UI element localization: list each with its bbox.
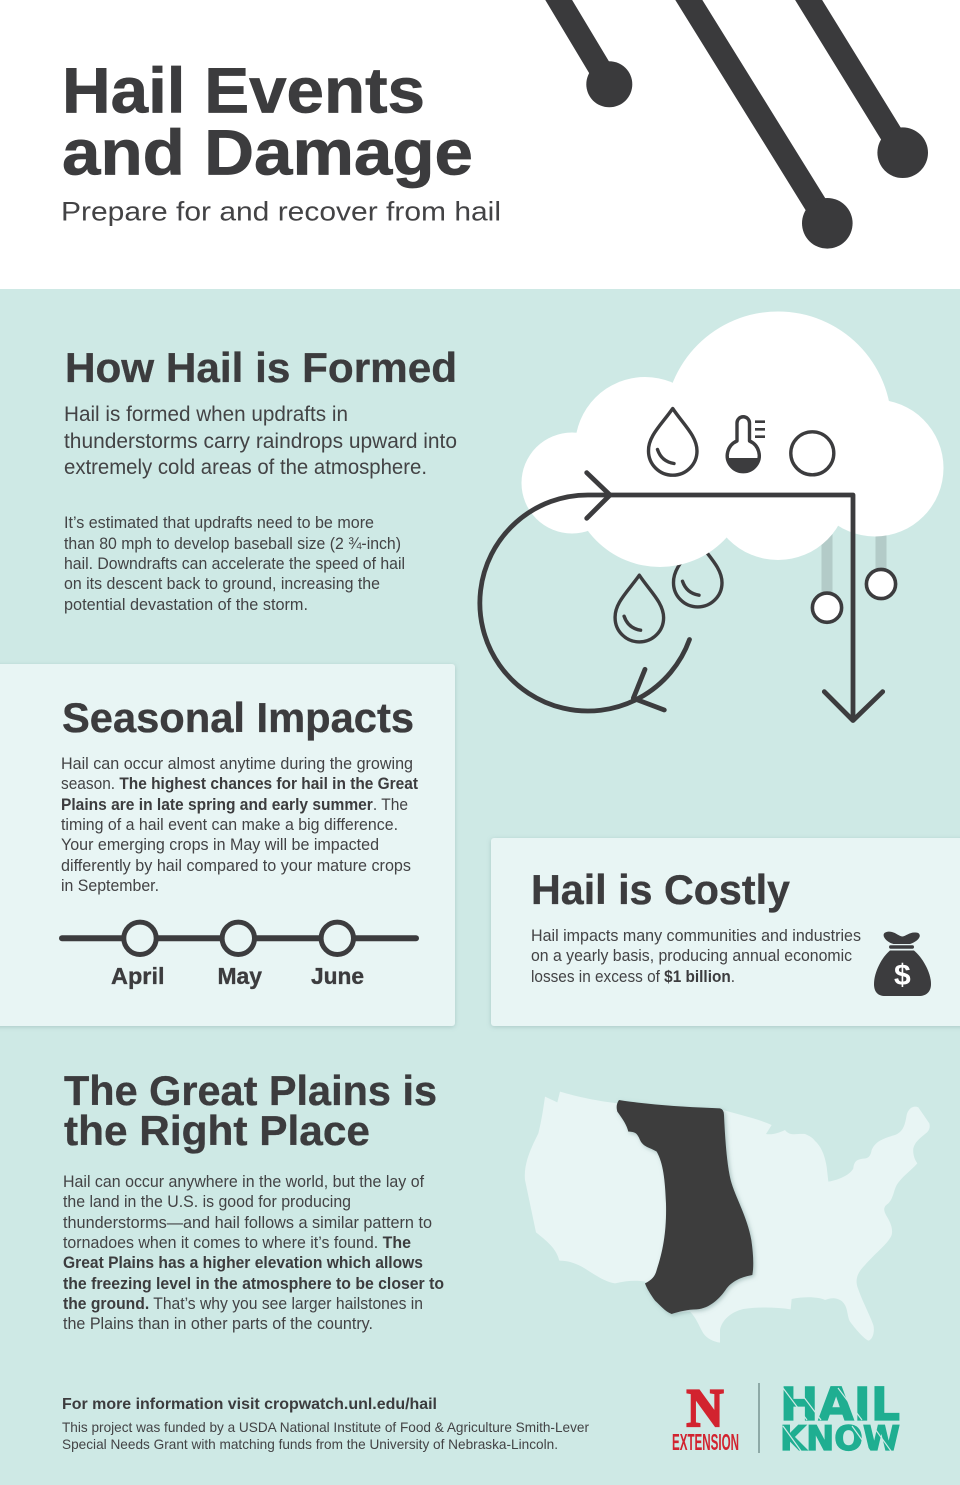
icon: raindrop in cloud	[648, 408, 697, 475]
costly text	[531, 927, 861, 986]
arrow: updraft loop and downdraft	[480, 473, 883, 720]
cloud	[522, 312, 944, 567]
seasonal text: in September.	[61, 877, 159, 895]
footer text: This project was funded by a USDA National Institute of Food & Agriculture Smith-Lever	[62, 1419, 589, 1435]
heading: hail is costly: Hail is Costly	[531, 866, 791, 913]
timeline: May	[218, 963, 262, 989]
panel: seasonal impacts	[0, 664, 455, 1026]
great plains text: the freezing level in the atmosphere to be closer to	[63, 1275, 444, 1293]
timeline: April	[111, 963, 164, 989]
costly text: Hail impacts many communities and industries	[531, 927, 861, 945]
panel: hail is costly	[491, 838, 960, 1026]
map: united states with great plains highlighted	[525, 1092, 930, 1343]
heading: seasonal impacts: Seasonal Impacts	[62, 694, 414, 741]
cloud diagram	[480, 312, 944, 720]
detail text: on its descent back to ground, increasing the	[64, 575, 380, 593]
seasonal text: differently by hail compared to your mature crops	[61, 857, 411, 875]
great plains text: the Plains than in other parts of the country.	[63, 1315, 373, 1333]
costly text: losses in excess of $1 billion.	[531, 968, 735, 986]
great plains text: the ground. That’s why you see larger hailstones in	[63, 1295, 423, 1313]
intro text: Hail is formed when updrafts in	[64, 403, 348, 426]
seasonal text: Your emerging crops in May will be impacted	[61, 836, 379, 854]
timeline	[62, 922, 416, 989]
map: us outline	[525, 1092, 930, 1343]
detail text: It’s estimated that updrafts need to be more	[64, 514, 374, 532]
great plains text: Hail can occur anywhere in the world, but the lay of	[63, 1173, 424, 1191]
great plains text: Great Plains has a higher elevation which allows	[63, 1254, 423, 1272]
logo: hail know	[780, 1378, 900, 1459]
raindrop behind cloud	[673, 540, 722, 607]
map: great plains region	[617, 1100, 753, 1314]
panel: how hail is formed text	[64, 344, 457, 614]
icon: thermometer	[727, 417, 765, 472]
logo: nebraska extension	[672, 1378, 739, 1455]
seasonal text: Plains are in late spring and early summer. The	[61, 796, 408, 814]
detail text: hail. Downdrafts can accelerate the speed of hail	[64, 555, 405, 573]
panel: great plains text	[63, 1067, 444, 1333]
icon: money bag	[874, 932, 931, 996]
great plains text: thunderstorms—and hail follows a similar pattern to	[63, 1214, 432, 1232]
logo: nebraska extension: EXTENSION	[672, 1429, 739, 1455]
footer text	[62, 1396, 589, 1452]
icon: falling hailstones	[812, 569, 896, 622]
title	[62, 55, 473, 188]
costly text: on a yearly basis, producing annual economic	[531, 947, 852, 965]
great plains text	[63, 1173, 444, 1333]
detail text	[64, 514, 405, 614]
logo: nebraska extension: N	[686, 1378, 724, 1438]
seasonal text: Hail can occur almost anytime during the growing	[61, 755, 413, 773]
title: and Damage	[62, 116, 473, 188]
great plains text: tornadoes when it comes to where it’s found. The	[63, 1234, 411, 1252]
heading: the great plains: The Great Plains is	[64, 1067, 437, 1114]
icon: hailstone in cloud	[791, 432, 834, 475]
timeline: June	[311, 963, 364, 989]
logo: hail know: HAIL	[780, 1378, 900, 1431]
intro text	[64, 403, 457, 479]
seasonal text	[61, 755, 418, 895]
intro text: thunderstorms carry raindrops upward into	[64, 430, 457, 453]
header hailstones	[554, 0, 928, 249]
logo: hail know: KNOW	[780, 1419, 900, 1459]
intro text: extremely cold areas of the atmosphere.	[64, 456, 427, 479]
heading: how hail is formed: How Hail is Formed	[65, 344, 457, 391]
detail text: potential devastation of the storm.	[64, 596, 308, 614]
subtitle: Prepare for and recover from hail	[61, 197, 501, 227]
seasonal text: timing of a hail event can make a big difference.	[61, 816, 398, 834]
icon: money bag: $	[894, 959, 911, 992]
detail text: than 80 mph to develop baseball size (2 ¾-inch)	[64, 535, 401, 553]
heading: the great plains: the Right Place	[64, 1107, 370, 1154]
great plains text: the land in the U.S. is good for producing	[63, 1193, 351, 1211]
icon: falling raindrop	[615, 575, 664, 642]
footer text: For more information visit cropwatch.unl.edu/hail	[62, 1396, 437, 1413]
divider	[758, 1383, 760, 1453]
hail streaks	[827, 520, 881, 600]
seasonal text: season. The highest chances for hail in the Great	[61, 775, 418, 793]
footer text: Special Needs Grant with matching funds from the University of Nebraska-Lincoln.	[62, 1436, 558, 1452]
title: Hail Events	[62, 55, 425, 127]
heading: the great plains	[64, 1067, 437, 1154]
